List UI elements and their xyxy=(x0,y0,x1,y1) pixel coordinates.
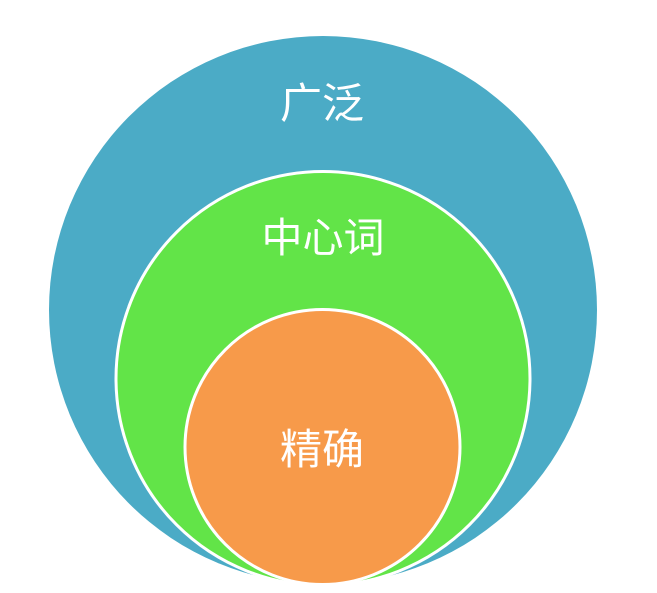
inner circle: precise: 精确 xyxy=(280,426,364,473)
outer circle: broad: 广泛 xyxy=(280,80,364,127)
middle circle: core term: 中心词 xyxy=(262,215,384,261)
inner circle: precise xyxy=(185,310,460,584)
